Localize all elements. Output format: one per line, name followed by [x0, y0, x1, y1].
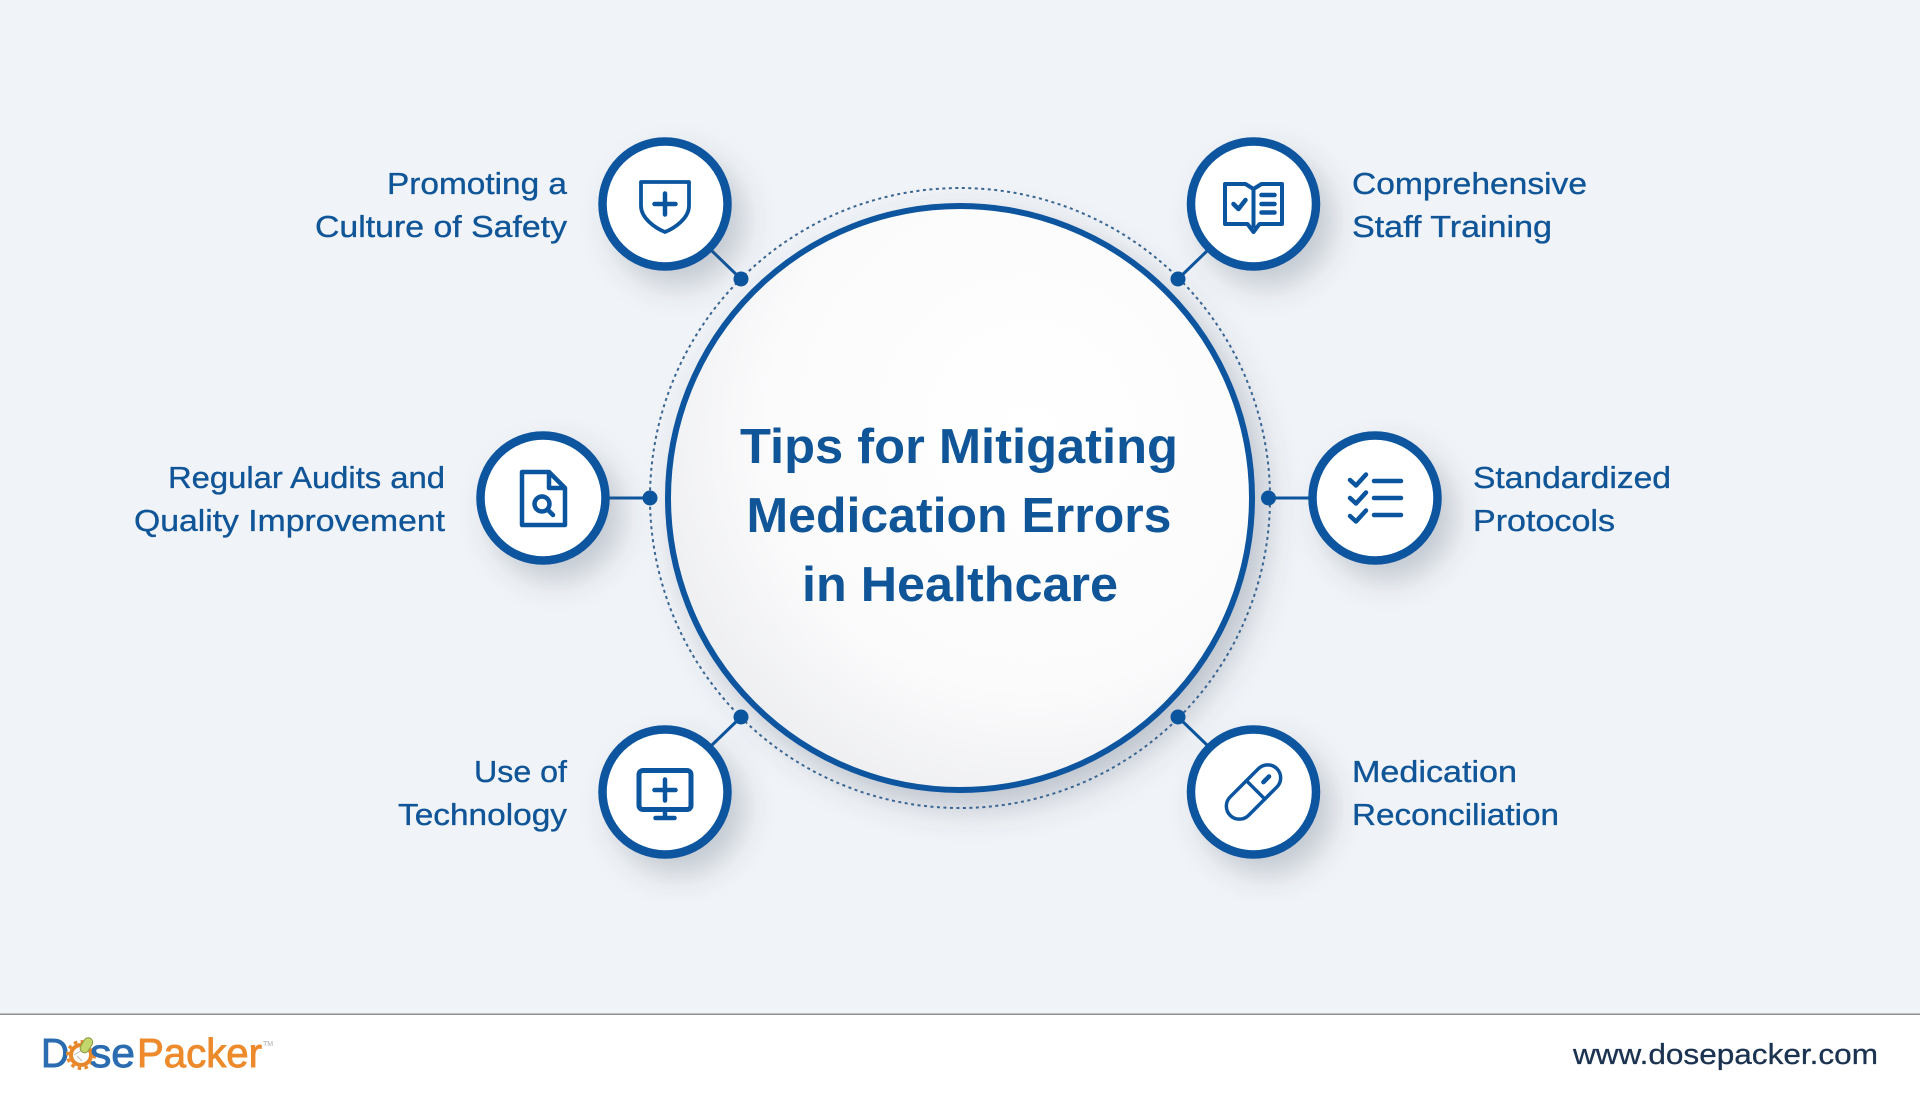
icon: open book with checklist — [1191, 142, 1316, 266]
label: Standardized Protocols: Standardized — [1473, 460, 1671, 495]
label: Regular Audits and Quality Improvement: Regular Audits and — [168, 460, 445, 495]
icon: checklist — [1312, 436, 1438, 560]
central circle with title — [668, 206, 1252, 790]
connector: bottom right — [1170, 710, 1207, 745]
label: Medication Reconciliation: Reconciliation — [1352, 797, 1559, 832]
label: Promoting a Culture of Safety: Culture of Safety — [315, 209, 568, 244]
connector: top right — [1170, 251, 1207, 286]
label: Medication Reconciliation — [1352, 754, 1559, 832]
logo: DosePacker — [41, 1030, 273, 1076]
label: Promoting a Culture of Safety: Promoting a — [387, 166, 568, 201]
label: Use of Technology — [398, 754, 568, 832]
label: Use of Technology: Technology — [398, 797, 568, 832]
connector: bottom left — [712, 710, 748, 745]
logo: DosePacker: D — [41, 1030, 69, 1076]
footer bar — [0, 1014, 1920, 1094]
title: in Healthcare — [802, 558, 1118, 612]
label: Promoting a Culture of Safety — [315, 166, 568, 244]
label: Comprehensive Staff Training — [1352, 166, 1587, 244]
connector: left — [608, 490, 658, 506]
icon: document with magnifier — [480, 436, 606, 560]
title — [740, 420, 1178, 612]
logo: DosePacker: Packer — [137, 1030, 262, 1076]
label: Standardized Protocols — [1473, 460, 1671, 538]
label: Medication Reconciliation: Medication — [1352, 754, 1517, 789]
label: Standardized Protocols: Protocols — [1473, 503, 1615, 538]
logo: DosePacker: TM — [263, 1041, 273, 1048]
icon: monitor with plus — [602, 730, 728, 854]
website url: www.dosepacker.com — [1572, 1039, 1878, 1071]
title: Medication Errors — [746, 489, 1172, 543]
label: Regular Audits and Quality Improvement: Quality Improvement — [134, 503, 445, 538]
logo: DosePacker: se — [90, 1030, 135, 1076]
icon: capsule pill — [1191, 730, 1316, 854]
connector: right — [1261, 490, 1310, 506]
icon: shield with plus — [602, 142, 728, 266]
dotted outer ring — [650, 188, 1270, 808]
title: Tips for Mitigating — [740, 420, 1178, 474]
connector: top left — [712, 251, 748, 286]
label: Comprehensive Staff Training: Staff Training — [1352, 209, 1552, 244]
label: Comprehensive Staff Training: Comprehensive — [1352, 166, 1587, 201]
label: Regular Audits and Quality Improvement — [134, 460, 445, 538]
label: Use of Technology: Use of — [474, 754, 567, 789]
